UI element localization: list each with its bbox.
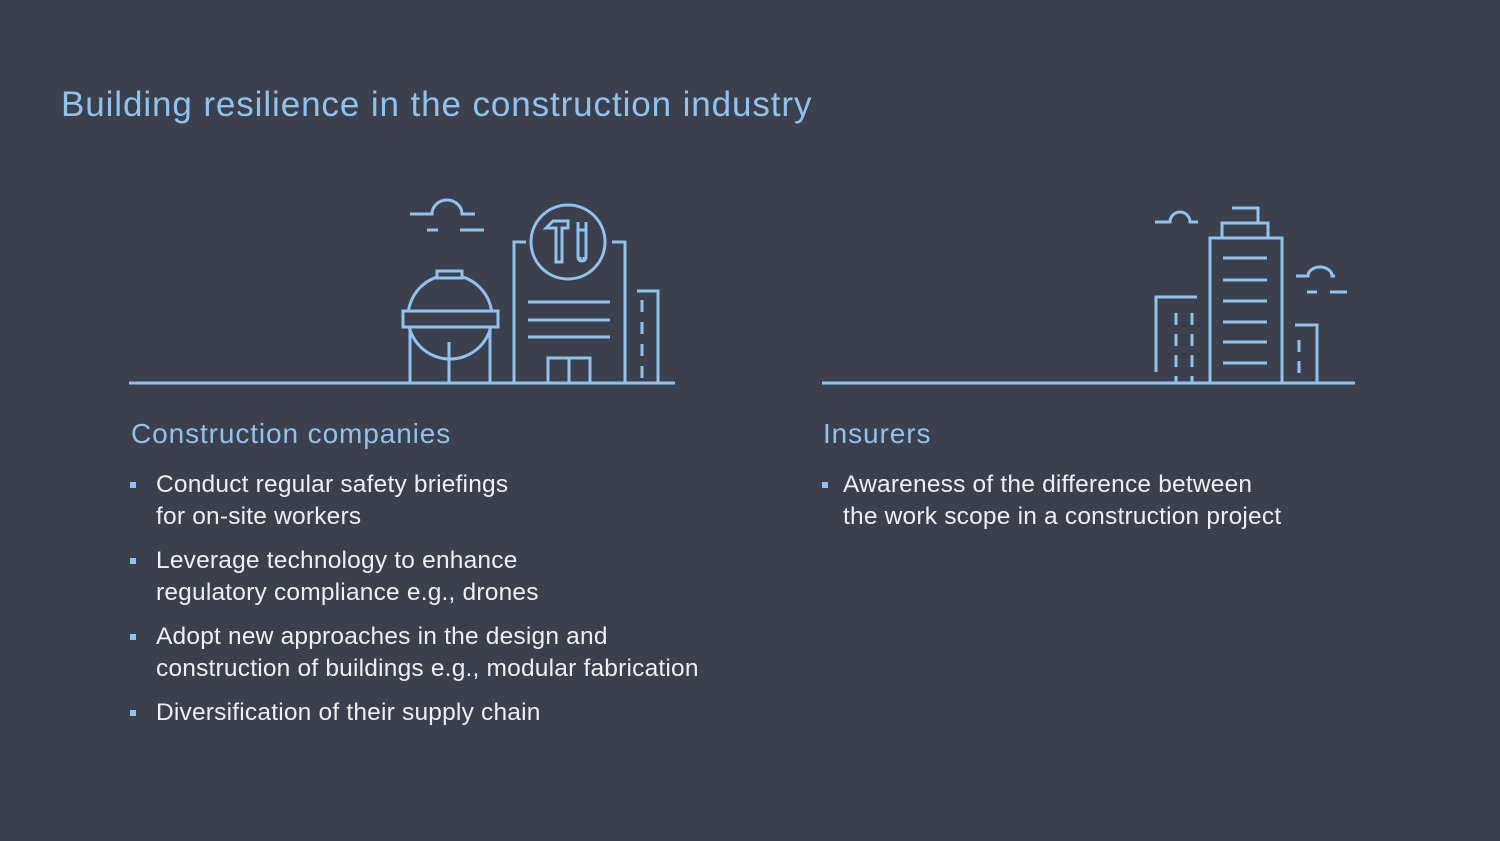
icon: city buildings (822, 208, 1355, 383)
icon: construction site (129, 200, 675, 383)
list: construction companies (130, 471, 699, 726)
list: construction companies: Conduct regular safety briefings (156, 471, 508, 498)
list: insurers (822, 471, 1281, 530)
heading: insurers: Insurers (823, 418, 931, 449)
list: construction companies: Adopt new approaches in the design and (156, 623, 608, 650)
list: construction companies: construction of buildings e.g., modular fabrication (156, 655, 699, 682)
list: insurers: the work scope in a construction project (843, 503, 1281, 530)
title: Building resilience in the construction industry (61, 85, 812, 124)
list: construction companies: for on-site workers (156, 503, 361, 530)
list: insurers: Awareness of the difference between (843, 471, 1252, 498)
list: construction companies: Leverage technology to enhance (156, 547, 518, 574)
list: construction companies: Diversification of their supply chain (156, 699, 541, 726)
list: construction companies: regulatory compliance e.g., drones (156, 579, 539, 606)
heading: construction companies: Construction companies (131, 418, 451, 449)
